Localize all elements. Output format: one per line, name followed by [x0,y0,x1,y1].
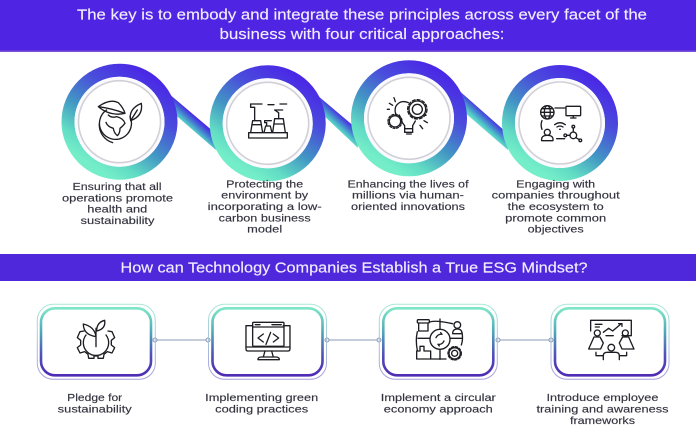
text: approach 2: Protecting the [226,178,303,190]
text: approach 1: health and [87,204,147,216]
text: step 3 [381,392,496,416]
gradient ring 4 [508,72,612,174]
text: step 2: Implementing green [205,392,318,404]
text: approach 4 [492,178,620,236]
ribbon connector: circle 1 to circle 2 [155,82,216,150]
icon: factories [249,104,287,138]
text: step 4 [536,392,668,427]
icon: training meeting [589,320,634,360]
text: approach 4: the ecosystem to [508,201,604,213]
panel: step 2 green coding [205,304,326,416]
text: step 3: economy approach [384,404,493,416]
ribbon connector: circle 2 to circle 3 [304,84,358,148]
white disc 4 [515,78,605,168]
text: approach 2 [208,178,322,236]
panel: approach 3 lives [348,67,469,213]
text: approach 4: promote common [505,212,606,224]
text: approach 1 [62,181,173,227]
text: step 2 [205,392,318,416]
text: approach 4: Engaging with [516,178,595,190]
top banner: The key is to embody and integrate these principles across every facet of the [77,8,647,24]
text: approach 2: carbon business [219,212,311,224]
white disc 1 [74,77,164,167]
box frame 3 [379,304,497,379]
icon: light bulb with gears [387,98,427,134]
text: step 4: training and awareness [536,404,668,416]
text: step 1: sustainability [58,404,133,416]
text: approach 4: objectives [528,224,584,236]
text: step 3: Implement a circular [381,392,496,404]
text: approach 4: companies throughout [492,190,620,202]
text: step 4: frameworks [570,415,635,427]
box frame 4 [551,304,669,379]
icon: globe with leaves [98,101,142,143]
section banner [0,254,696,281]
text: approach 3: oriented innovations [351,201,465,213]
gradient ring 2 [216,72,319,175]
text: approach 1: sustainability [80,215,155,227]
text: step 1 [58,392,133,416]
icon: code monitor [246,322,290,360]
gradient ring 1 [68,70,171,173]
box frame 1 [37,304,155,379]
white disc 3 [364,73,454,163]
panel: approach 4 engaging [492,72,620,236]
text: approach 1: operations promote [62,192,173,204]
text: approach 3 [348,178,469,213]
top banner [0,0,696,52]
panel: approach 1 health [62,70,173,227]
white disc 2 [223,78,313,168]
connector lines between boxes [153,338,553,342]
icon: connected network [541,106,582,142]
icon: circular economy [416,319,463,360]
panel: step 4 employee training [536,304,669,427]
icon: sprout in gear [77,320,115,358]
text: approach 2: model [247,224,282,236]
gradient ring 3 [358,67,460,170]
text: approach 3: millions via human- [352,190,465,202]
panel: step 1 pledge [37,304,155,416]
section banner: How can Technology Companies Establish a True ESG Mindset? [120,260,588,276]
ribbon connector: circle 3 to circle 4 [447,80,508,150]
text: approach 3: Enhancing the lives of [348,178,469,190]
text: step 4: Introduce employee [546,392,659,404]
text: approach 2: environment by [221,190,309,202]
text: approach 1: Ensuring that all [72,181,162,193]
box frame 2 [208,304,326,379]
text: approach 2: incorporating a low- [208,201,322,213]
top banner: business with four critical approaches: [220,27,504,43]
panel: step 3 circular economy [379,304,497,416]
text: step 2: coding practices [215,404,308,416]
panel: approach 2 environment [208,72,322,236]
text: step 1: Pledge for [67,392,123,404]
